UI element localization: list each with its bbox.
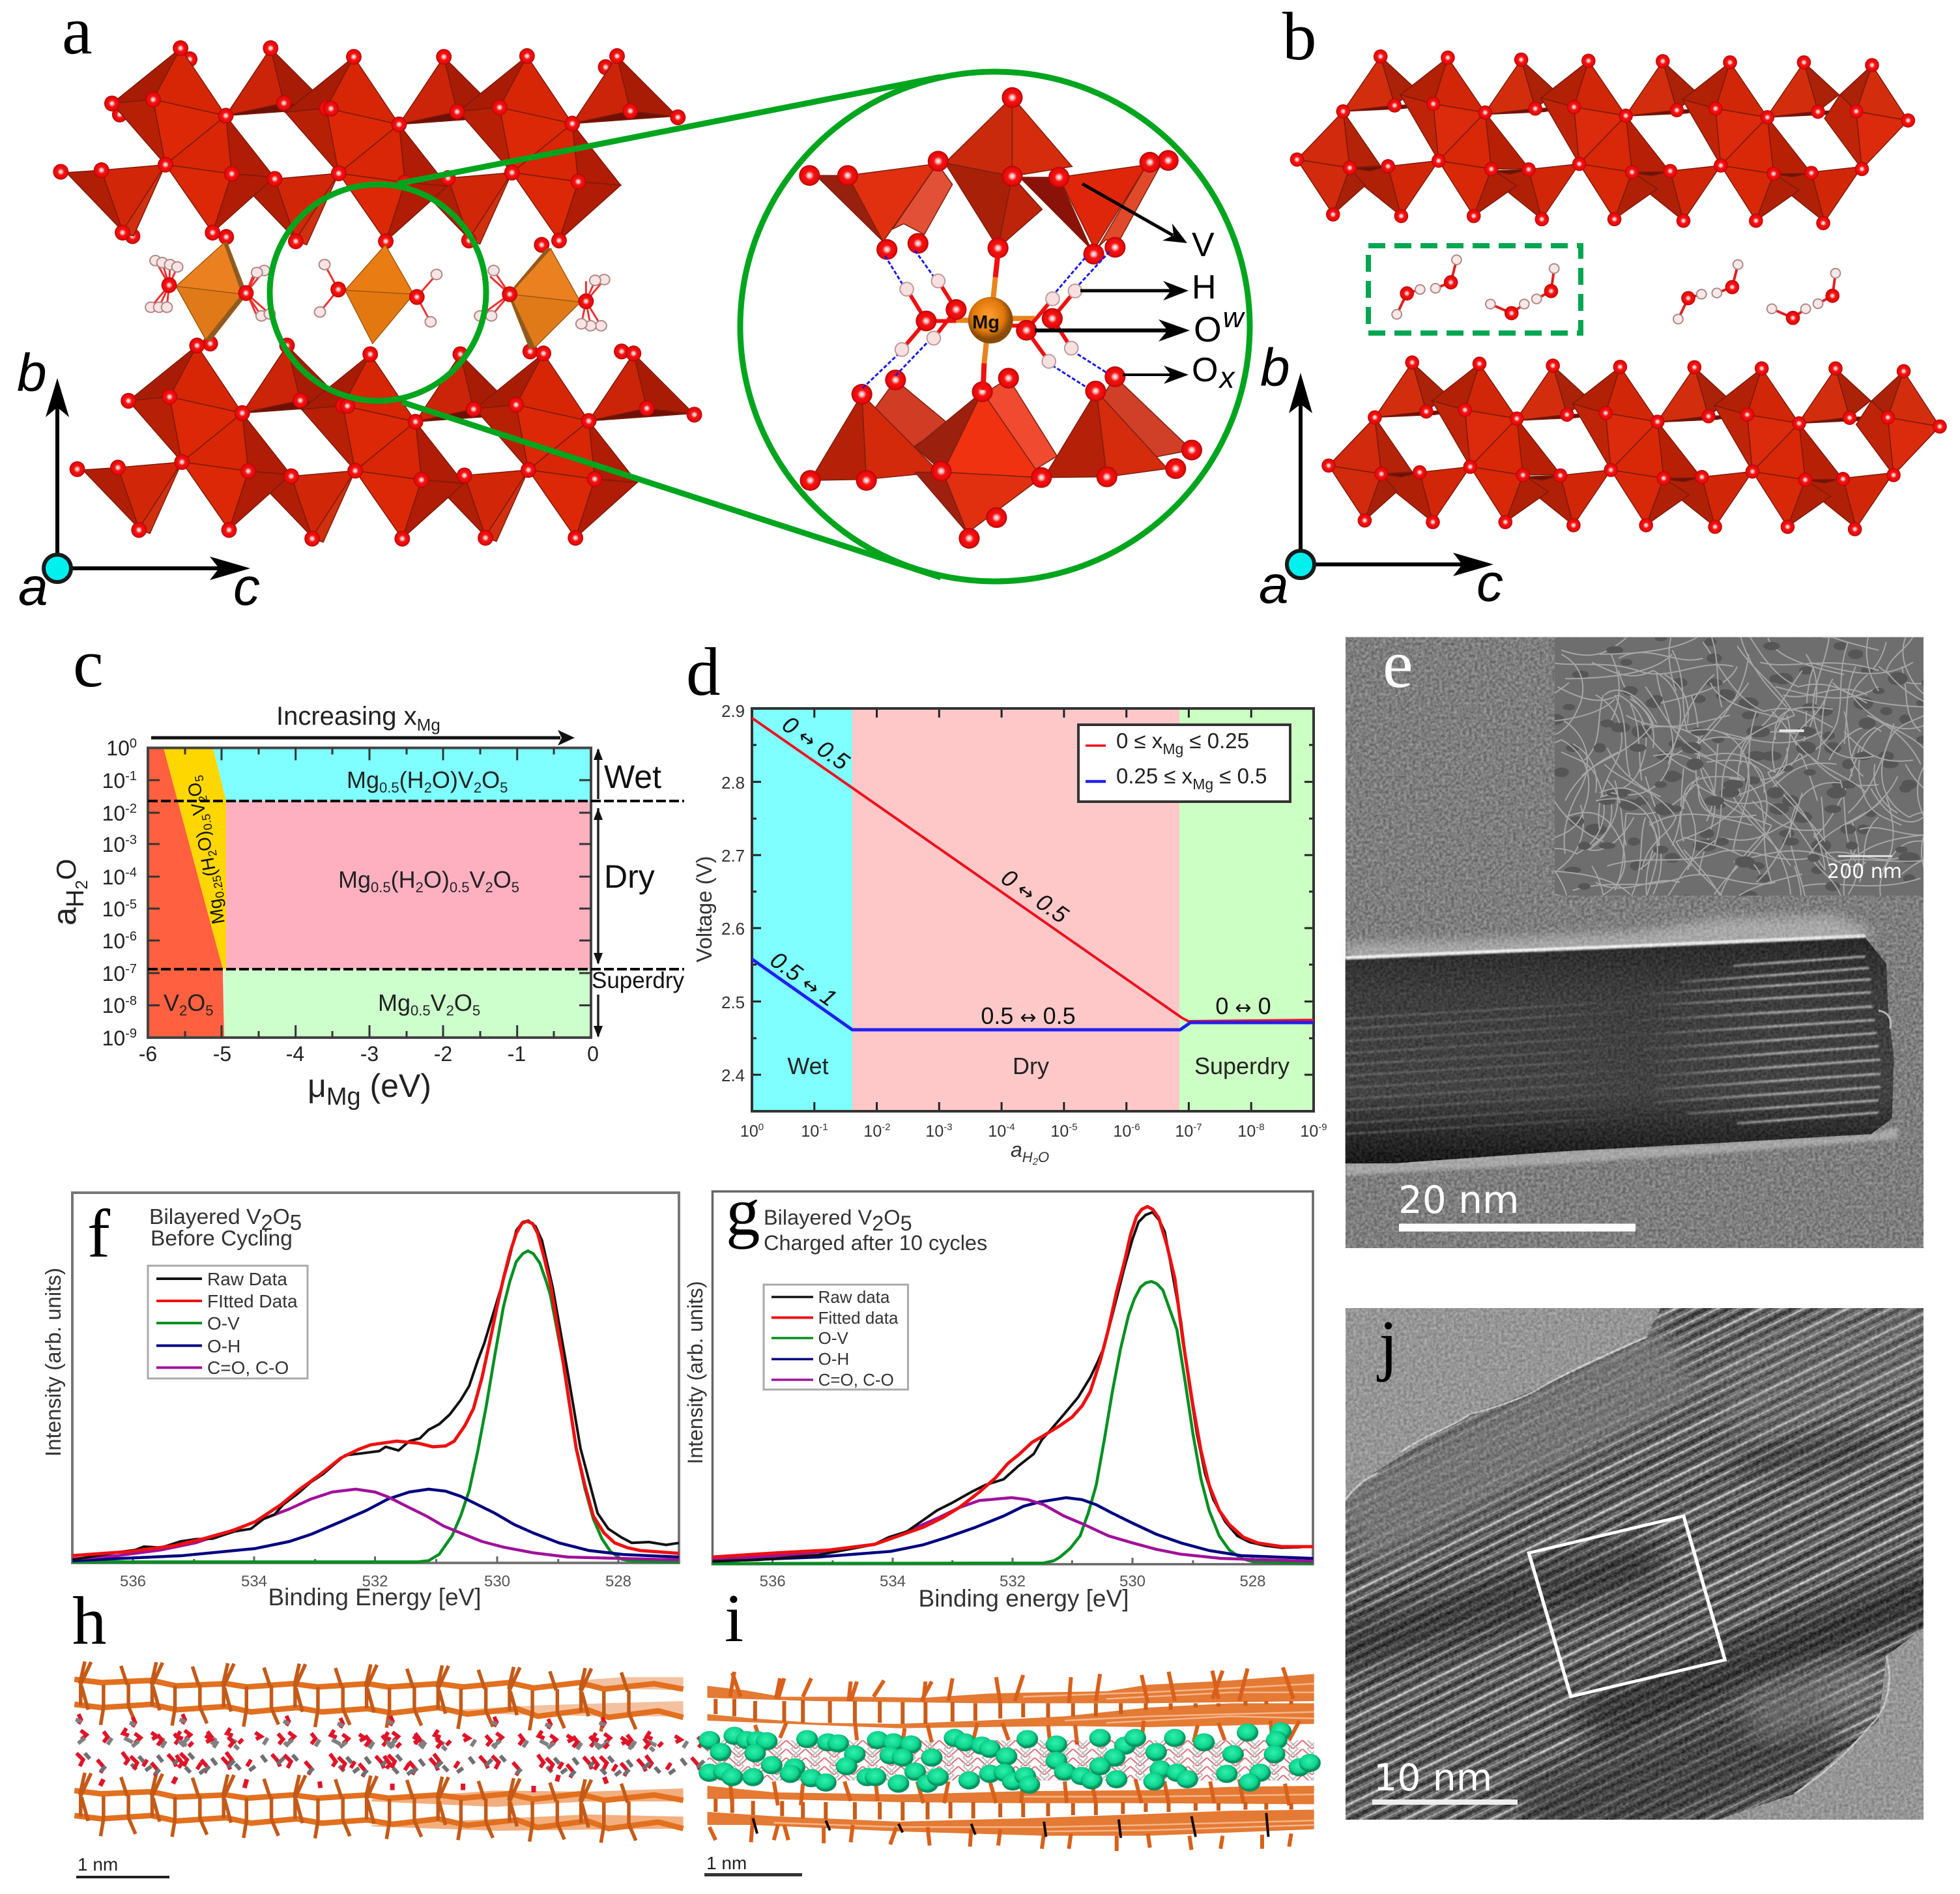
transition labels: 0 ↔ 0 [1215,993,1271,1019]
legend: Mg [1192,776,1213,793]
phase labels: Mg [205,897,229,925]
phase labels: 5 [205,1002,214,1019]
y tick labels: 10 [102,1027,125,1050]
axes a b c: b [17,343,47,403]
x tick labels: -1 [819,1122,828,1133]
y tick labels: 10 [102,769,125,793]
panel j label: j [1376,1306,1398,1382]
x tick labels: -6 [139,1042,157,1066]
atom labels: H [1192,269,1217,306]
humidity ranges [592,748,685,1038]
legend [764,1285,908,1390]
sample caption: 5 [290,1210,302,1234]
increasing arrow [151,702,575,746]
panel f label: f [87,1195,110,1272]
sample caption: 5 [901,1212,912,1235]
V2O5 layers and Mg octahedra [53,40,702,547]
x tick labels: 532 [362,1573,388,1590]
panel h label: h [72,1582,107,1659]
x tick labels: 536 [760,1573,786,1590]
phase labels: O) [192,830,216,853]
x tick labels: -2 [434,1042,452,1066]
phase labels: Mg [378,989,411,1016]
main scale bar: 20 nm [1398,1178,1520,1222]
x tick labels: 10 [1050,1122,1069,1141]
phase labels [164,766,519,1019]
zoom circles and connecting lines [270,72,1250,581]
x tick labels [139,1042,599,1066]
y axis title: O [51,859,81,880]
axis titles: a [1011,1138,1022,1161]
plot frame [72,1193,679,1563]
panel f: XPS before cycling [41,1193,679,1610]
scale bar: 1 nm [706,1853,747,1873]
x tick labels: 530 [484,1573,510,1590]
panel g label: g [726,1173,760,1249]
y tick labels: 10 [102,897,125,921]
axes a b c: b [1260,338,1290,398]
x tick labels: 0 [758,1122,764,1133]
x tick labels: 10 [1237,1122,1256,1141]
y tick labels: -6 [125,929,137,944]
sample caption: Charged after 10 cycles [764,1231,987,1255]
phase labels: 2 [196,794,210,803]
legend: ≤ 0.5 [1213,764,1267,788]
x tick labels: 530 [1119,1573,1146,1590]
y axis title: 2 [72,880,91,890]
phase labels: O [184,781,206,798]
x tick labels: 528 [605,1573,631,1590]
scale bar: 10 nm [1374,1756,1492,1799]
legend: O-H [818,1349,849,1369]
y tick labels: -2 [125,802,137,816]
phase labels: 5 [192,774,207,783]
x tick labels: 536 [120,1573,146,1590]
phase labels: 2 [424,779,432,796]
phase labels: 5 [500,779,508,796]
axes a b c [1259,338,1503,615]
main scale bar [1398,1178,1636,1232]
x tick labels: -5 [1069,1122,1078,1133]
arrow: Ow [1035,319,1190,342]
x tick labels: 10 [1175,1122,1193,1141]
legend [148,1266,308,1378]
y tick labels: 10 [102,994,125,1017]
atom labels: V [1192,226,1215,264]
blue voltage line [752,959,1314,1030]
x tick labels: 10 [801,1122,819,1141]
panel d: voltage chart [686,634,1327,1167]
phase labels: O [187,989,205,1016]
panel b: hydrated V2O5 [1259,0,1947,615]
y tick labels: 10 [102,802,125,825]
phase labels: O [454,989,472,1016]
phase labels: 0.5 [411,1002,431,1019]
lattice and water [74,1661,708,1843]
y tick labels: 2.7 [721,846,745,866]
phase labels: O)V [432,766,474,793]
legend: Mg [1162,740,1183,757]
y tick labels: -5 [125,897,137,912]
x axis title: μ [308,1068,326,1104]
sample caption: O [273,1205,290,1229]
axis titles: O [1038,1149,1049,1165]
sample caption: 2 [261,1210,273,1234]
humidity ranges: Superdry [592,968,685,993]
y tick labels: -4 [125,866,137,880]
panel g: XPS after cycling [684,1173,1313,1612]
V2O5 layers and water [1290,50,1947,536]
phase labels: V [164,989,179,1016]
phase labels: (H [197,856,220,879]
legend: O-V [207,1313,240,1333]
panel e: TEM micrograph with SEM inset [1346,613,1960,1248]
region labels: Wet [787,1053,829,1079]
panel i label: i [725,1580,743,1656]
y tick labels: 2.5 [721,993,745,1012]
sample caption: Before Cycling [151,1227,293,1251]
x tick labels: -7 [1193,1122,1202,1133]
phase labels: O [493,866,512,893]
transition labels [766,710,1271,1029]
phase labels: 0.25 [210,874,227,899]
TEM background [1346,637,1924,1248]
inset scale bar: 200 nm [1827,860,1902,883]
phase labels: 0.5 [379,779,399,796]
x tick labels [760,1573,1266,1590]
axis titles: Binding Energy [eV] [268,1584,482,1610]
y tick labels: 10 [106,736,130,760]
legend: O-V [818,1328,848,1348]
panel j: high resolution TEM [1345,1308,1924,1820]
x tick labels: -5 [213,1042,231,1066]
x tick labels [120,1573,631,1590]
legend: C=O, C-O [207,1358,289,1378]
grain noise [1346,1308,1924,1820]
phase labels: (H [391,866,416,893]
arrow: V [1082,184,1187,243]
x tick labels: -3 [944,1122,953,1133]
panel c label: c [73,625,104,701]
x tick labels: 10 [740,1122,758,1141]
SEM inset [1555,637,1924,896]
phase labels: V [469,866,485,893]
x tick labels: -8 [1256,1122,1265,1133]
y tick labels: 2.6 [721,919,745,939]
phase labels: 2 [474,779,482,796]
x tick labels: 528 [1239,1573,1266,1590]
phase labels: 5 [512,879,519,896]
panel i: MD snapshot with Mg [699,1580,1321,1876]
transition labels: 0.5 ↔ 1 [766,946,842,1012]
axis titles: Intensity (arb. units) [684,1281,707,1464]
red voltage line [752,718,1314,1021]
axes a b c: c [1477,553,1503,613]
x tick labels: 10 [988,1122,1006,1141]
panel d label: d [686,634,721,710]
sample caption: Bilayered V [764,1206,872,1229]
arrow: H [1080,281,1189,300]
y tick labels: 10 [102,866,125,889]
phase labels: 0.5 [371,879,391,896]
x tick labels: -1 [508,1042,526,1066]
phase labels: 2 [205,849,220,858]
axes a b c: a [1259,555,1289,615]
phase labels: 2 [485,879,493,896]
atom labels: x [1218,360,1235,394]
x tick labels: 534 [880,1573,906,1590]
rod edge highlight [1346,1337,1889,1794]
Mg label: Mg [972,312,1000,333]
y tick labels: 2.4 [721,1066,745,1085]
phase labels: 2 [179,1002,187,1019]
axis titles [41,1268,482,1610]
legend: Raw data [818,1287,890,1307]
y tick labels [102,736,137,1050]
atom labels [1192,226,1246,394]
phase labels: 2 [446,1002,454,1019]
axes a b c: c [233,557,260,617]
region labels: Superdry [1194,1053,1290,1079]
axes a b c [17,343,260,617]
chart plot area [752,708,1314,1111]
legend [1078,725,1290,802]
arrow: Ox [1123,366,1189,384]
legend: 0.25 ≤ x [1116,764,1192,788]
y tick labels: 2.8 [721,773,745,793]
x tick labels: 10 [1113,1122,1131,1141]
x tick labels: -9 [1318,1122,1327,1133]
white selection box [1529,1516,1725,1697]
axis titles [684,1281,1129,1612]
phase labels: 2 [416,879,424,896]
y tick labels: 0 [130,736,137,751]
y tick labels: 2.9 [721,701,745,721]
panel c: phase diagram [46,625,685,1111]
y tick labels: -9 [125,1027,137,1041]
y tick labels: -8 [125,994,137,1008]
scale bar: 1 nm [78,1854,118,1874]
panel b label: b [1282,0,1316,74]
sample caption [149,1205,302,1251]
phase labels: 0.5 [199,813,215,831]
humidity ranges: Dry [604,858,655,895]
y tick labels: -7 [125,962,137,976]
axis titles: Binding energy [eV] [919,1585,1129,1612]
phase labels: V [188,801,209,817]
spectrum curves [713,1206,1313,1564]
phase labels: O [482,766,500,793]
lattice, water and Mg ions [699,1667,1321,1851]
y axis title: a [46,907,83,925]
x tick labels: 10 [1300,1122,1318,1141]
nanorod [1346,915,1897,1176]
panel e label: e [1383,626,1413,702]
phase boundary dashed lines [148,801,684,969]
sample caption: Bilayered V [149,1205,261,1229]
axis titles: 2 [1032,1156,1039,1167]
dashed green box [1368,246,1581,333]
increasing arrow: Increasing x [276,702,417,731]
atom labels: w [1223,302,1246,334]
x axis title: (eV) [361,1068,431,1104]
sample caption: O [884,1206,901,1229]
y tick labels: -3 [125,833,137,847]
region labels [787,1053,1290,1079]
magnified inset structure [799,87,1202,549]
axis titles: H [1022,1149,1033,1165]
y axis title: H [62,890,89,907]
legend: 0 ≤ x [1116,729,1162,753]
transition labels: 0 ↔ 0.5 [777,710,855,776]
x tick labels: -3 [360,1042,379,1066]
scale bar [76,1854,169,1878]
x tick labels: 10 [925,1122,944,1141]
y tick labels: 10 [102,929,125,953]
atom labels: O [1194,309,1222,349]
atom labels: O [1192,351,1218,389]
nanorod body [1317,1308,1948,1828]
legend: ≤ 0.25 [1183,729,1249,753]
phase labels: (H [399,766,424,793]
transition labels: 0 ↔ 0.5 [996,864,1074,929]
y tick labels: -1 [125,769,137,783]
phase labels: O) [424,866,450,893]
legend: O-H [207,1336,240,1356]
axis titles [692,856,1049,1167]
humidity ranges: Wet [604,759,661,795]
x tick labels: -4 [1006,1122,1015,1133]
x tick labels: 534 [241,1573,267,1590]
axis titles: Intensity (arb. units) [41,1268,65,1457]
spectrum curves [72,1221,679,1562]
axes a b c: a [18,557,48,617]
sample caption: 2 [872,1212,884,1235]
phase labels: Mg [338,866,371,893]
legend: Raw Data [207,1269,287,1289]
legend: FItted Data [207,1291,298,1311]
legend: Fitted data [818,1308,899,1328]
panel a: Mg-hydrated structure [17,0,1250,617]
legend: C=O, C-O [818,1370,894,1390]
colored phase regions [148,748,591,1038]
y tick labels [721,701,745,1085]
TEM background [1346,1308,1924,1820]
rod grain [1346,935,1894,1163]
x tick labels [740,1122,1327,1141]
x axis title: Mg [326,1083,361,1111]
scale bar [704,1853,802,1876]
axis titles: Voltage (V) [692,856,716,963]
x tick labels: 0 [587,1042,599,1066]
y tick labels: 10 [102,962,125,985]
x tick labels: 10 [863,1122,882,1141]
panel h: MD snapshot without Mg [72,1582,708,1878]
increasing arrow: Mg [417,715,440,735]
phase labels: 5 [472,1002,480,1019]
transition labels: 0.5 ↔ 0.5 [981,1002,1076,1029]
phase labels: V [431,989,446,1016]
sample caption [764,1206,987,1255]
x tick labels: -2 [882,1122,891,1133]
x tick labels: 532 [1000,1573,1026,1590]
plot frame [713,1191,1313,1564]
x tick labels: -6 [1131,1122,1140,1133]
x tick labels: -4 [286,1042,304,1066]
phase labels: Mg [347,766,379,793]
phase labels: 0.5 [450,879,469,896]
grain noise [1346,637,1924,1248]
y tick labels: 10 [102,833,125,856]
region labels: Dry [1013,1053,1049,1079]
